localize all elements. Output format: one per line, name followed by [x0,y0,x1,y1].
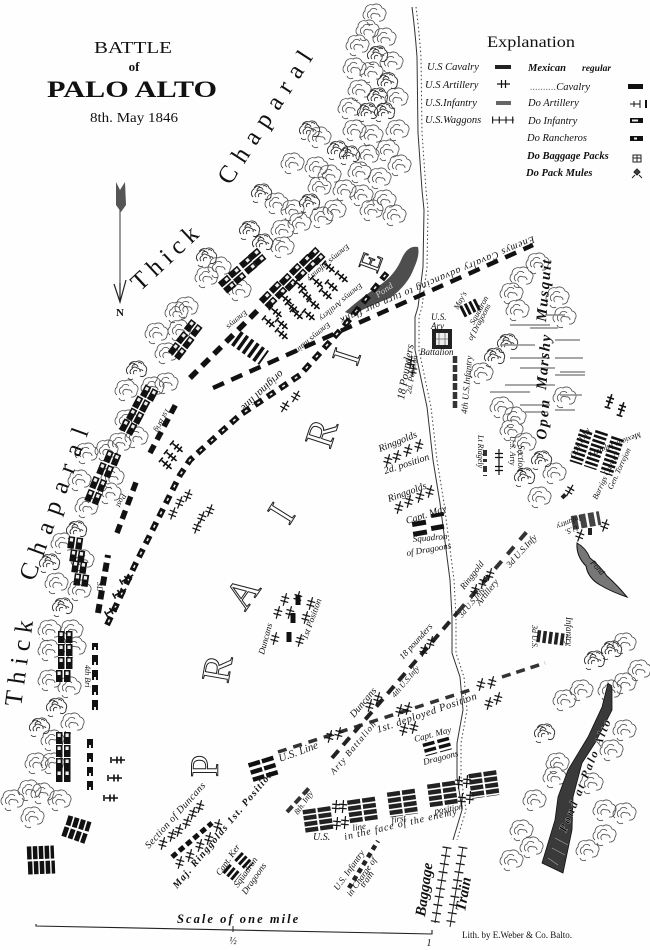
Capt. Ker's squadron of dragoons [213,842,269,897]
legend: ..........Cavalry [530,82,590,93]
U.S. Artillery battalion square [420,312,454,357]
thick chaparral woods: upper cluster [165,4,411,323]
legend: Do Infantry [527,116,578,127]
central Mexican block: Enemys Infantry [305,242,352,283]
labels: Mexican positions: original line [238,368,286,414]
scale bar: Scale of one mile [177,912,299,926]
labels: Mexican positions [83,368,286,687]
Mexican units in chaparral [56,248,266,782]
3d U.S. infantry [530,616,574,649]
Mexican original line [107,273,387,625]
labels: open marshy musquit [534,258,555,440]
May's squadron dragoons upper: Squadron [468,294,490,326]
title: 8th. May 1846 [90,111,178,126]
title letters: PRAIRIE: A [216,568,269,617]
north arrow: N [116,307,124,319]
U.S. infantry east: Infantry [555,513,584,531]
central Mexican block: Enemys main [294,320,333,355]
Capt. May dragoons lower: Capt. May [413,724,452,744]
U.S. first position line: position [433,801,464,816]
central Mexican block [225,242,365,358]
U.S. first position line: in the face of the enemy [343,806,458,843]
title: BATTLE [94,38,172,57]
U.S. infantry in charge of train: U.S. Infantry [331,848,366,892]
legend: Do Pack Mules [525,168,592,179]
U.S. artillery section [476,434,526,476]
scale bar: 1 [426,938,432,949]
Mexican first column units [90,306,262,790]
U.S. second line: 3d U.S.Infy [456,585,487,620]
U.S. first position line: line [352,821,367,833]
Capt. Ker's squadron of dragoons: Dragoons [239,861,269,897]
3d U.S. infantry: Infantry [564,616,574,646]
scale bar: ½ [229,936,237,947]
U.S. infantry in charge of train [331,841,379,898]
marsh strokes [490,315,585,412]
road with dotted edge [412,7,467,840]
18 pounders second position: 2d. Position [404,355,420,394]
U.S. second line: Duncans [347,686,379,721]
title letters: PRAIRIE: R [296,413,347,453]
U.S. line first deployed [254,663,545,783]
Ringgolds second position [376,429,431,477]
Capt. May dragoons lower: Dragoons [421,748,460,767]
labels: Mexican positions: Post [114,491,129,510]
labels: open marshy musquit: Musquit [534,258,555,323]
Duncans' first position: Duncans [256,622,274,656]
Ringgolds second position: 2d. position [383,452,431,477]
legend: Do Artillery [527,98,579,109]
legend [425,34,647,179]
May's squadron dragoons upper: of Dragoons [466,302,493,342]
label: Thick Chaparal upper: Chaparal [212,39,323,189]
U.S. second line: Arty Battalion [327,719,378,777]
legend: U.S.Infantry [425,98,477,109]
U.S. infantry in charge of train: train [357,869,376,889]
U.S. second line: 18 pounders [397,621,435,661]
U.S. Artillery battalion square: U.S. [431,312,446,322]
small pond on east [577,543,627,597]
label: Thick Chaparal upper [126,39,323,296]
label: Thick Chaparal lower: Chaparal [14,415,98,584]
legend: U.S.Waggons [425,115,481,126]
Mexican cavalry block east: Mexican Infantry [588,430,644,459]
title: of [129,59,140,74]
pond of Palo Alto [542,683,614,873]
title letters: PRAIRIE: P [182,755,227,777]
legend: Do Baggage Packs [526,151,609,162]
U.S. second line: Ringgold [457,559,486,592]
4th U.S. infantry column: 4th U.S.Infantry [459,355,474,414]
Enemy's cavalry line [213,233,537,388]
labels: open marshy musquit: Marshy [534,334,555,391]
Enemy's cavalry line: Enemys Cavalry advancing to turn our flank [338,233,537,326]
Capt. May squadron of dragoons: Capt. May [405,503,449,527]
Capt. May squadron of dragoons [405,503,452,558]
U.S. first position line: first [391,813,407,825]
label: Thick Chaparal lower: Thick [0,612,40,708]
legend: regular [582,64,611,74]
Mexican cavalry block east [562,393,644,501]
U.S. Artillery battalion square: Battalion [420,347,454,357]
Mexican cavalry block east: Com.d. by [568,426,592,459]
title letters: PRAIRIE [182,248,390,777]
artillery pieces: west [104,389,302,802]
U.S. first position line [309,771,493,843]
May's squadron dragoons upper [451,290,493,342]
label: Thick Chaparal lower [0,415,98,708]
Capt. May dragoons lower [413,724,460,767]
U.S. artillery section: Section [516,445,526,472]
scale bar [36,912,432,949]
U.S. Artillery battalion square: Ary [430,321,444,331]
pond at north: Pond [373,280,395,300]
north arrow [114,182,126,319]
title letters: PRAIRIE: R [193,651,242,686]
baggage train: Baggage [413,861,437,919]
May's squadron dragoons upper: May's [451,290,469,312]
legend: Mexican [527,63,566,74]
U.S. second line: Artillery [473,577,500,608]
Section of Duncans and Maj. Ringgold's 1st position: Maj. Ringgolds 1st. Position [170,769,276,892]
U.S. line first deployed: U.S. Line [277,739,320,765]
labels: Mexican positions: 4th Bri [83,665,92,687]
U.S. infantry east: U.S. [563,523,580,537]
title letters: PRAIRIE: E [353,248,390,276]
pond at north [345,247,418,315]
title: PALO ALTO [47,77,217,102]
woods around pond at Palo Alto [500,633,650,871]
Ringgolds second position: Ringgolds [376,429,419,455]
legend: U.S Artillery [425,80,479,91]
3d U.S. infantry: 3d U.S. [530,624,539,649]
Section of Duncans and Maj. Ringgold's 1st position: Section of Duncans [143,780,208,851]
Ringgolds third: Ringgolds [385,481,428,505]
central Mexican block: Enemys [225,308,250,331]
U.S. artillery section: U.S. Arty [508,436,517,466]
lithographer credit: Lith. by E.Weber & Co. Balto. [462,930,572,940]
Capt. May squadron of dragoons: of Dragoons [406,540,452,558]
Mexican cavalry block east: Barrigs Cavalry [591,449,621,501]
thick chaparral woods: western arc [1,320,191,828]
Duncans' first position [256,590,324,656]
U.S. infantry in charge of train: in Charge of [344,854,379,898]
baggage train [413,847,475,927]
title letters: PRAIRIE: I [258,496,304,531]
U.S. second line: 4th U.S.Infy [390,664,422,699]
label: Thick Chaparal upper: Thick [126,216,209,296]
U.S. second line [324,528,539,777]
U.S. artillery section: Lt Ridgely [476,434,485,469]
U.S. line first deployed: 1st. deployed Position [375,691,478,736]
open marshy musquit: trees [470,253,576,508]
U.S. first position line: U.S. [313,832,330,843]
small pond on east: Pond [588,558,607,578]
legend: Do Rancheros [526,133,587,144]
labels: open marshy musquit: Open [534,399,553,440]
Capt. May squadron of dragoons: Squadron [412,531,448,544]
U.S. second line: 3d U.S.Infy [503,532,539,570]
18 pounders second position: 18 Pounders [395,343,417,401]
legend: U.S Cavalry [427,62,479,73]
Capt. Ker's squadron of dragoons: Capt. Ker [213,842,242,877]
labels: Mexican positions: 3D [95,581,104,592]
title [47,38,217,126]
Mexican cavalry block east: Gen. Torrejon [606,446,633,491]
Capt. Ker's squadron of dragoons: Squadron [231,855,260,889]
bottom-left Mexican units [27,820,90,868]
8th Infantry: 8th. Infy [292,789,315,816]
central Mexican block: Enemys Artillery [317,281,365,323]
baggage train: Train [453,876,475,913]
Ringgolds third [385,481,435,515]
Duncans' first position: 1st Position [299,597,324,641]
title letters: PRAIRIE: I [323,343,370,370]
U.S. infantry east [555,513,611,543]
legend: Explanation [487,34,575,51]
labels: Mexican positions: 1st Brig [152,407,172,434]
pond of Palo Alto: Pond at Palo Alto [556,718,614,834]
